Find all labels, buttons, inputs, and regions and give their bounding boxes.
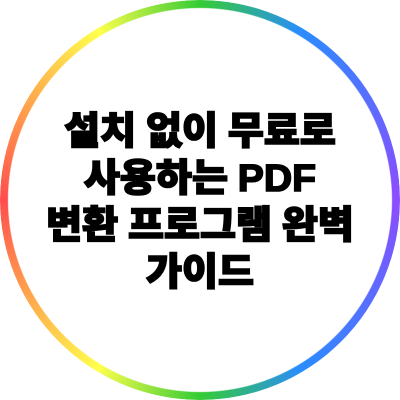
- title: 설치 없이 무료로: [64, 111, 336, 153]
- title: 사용하는 PDF: [84, 158, 316, 200]
- title: [46, 110, 354, 294]
- title: 가이드: [146, 252, 254, 294]
- title: 변환 프로그램 완벽: [46, 205, 354, 247]
